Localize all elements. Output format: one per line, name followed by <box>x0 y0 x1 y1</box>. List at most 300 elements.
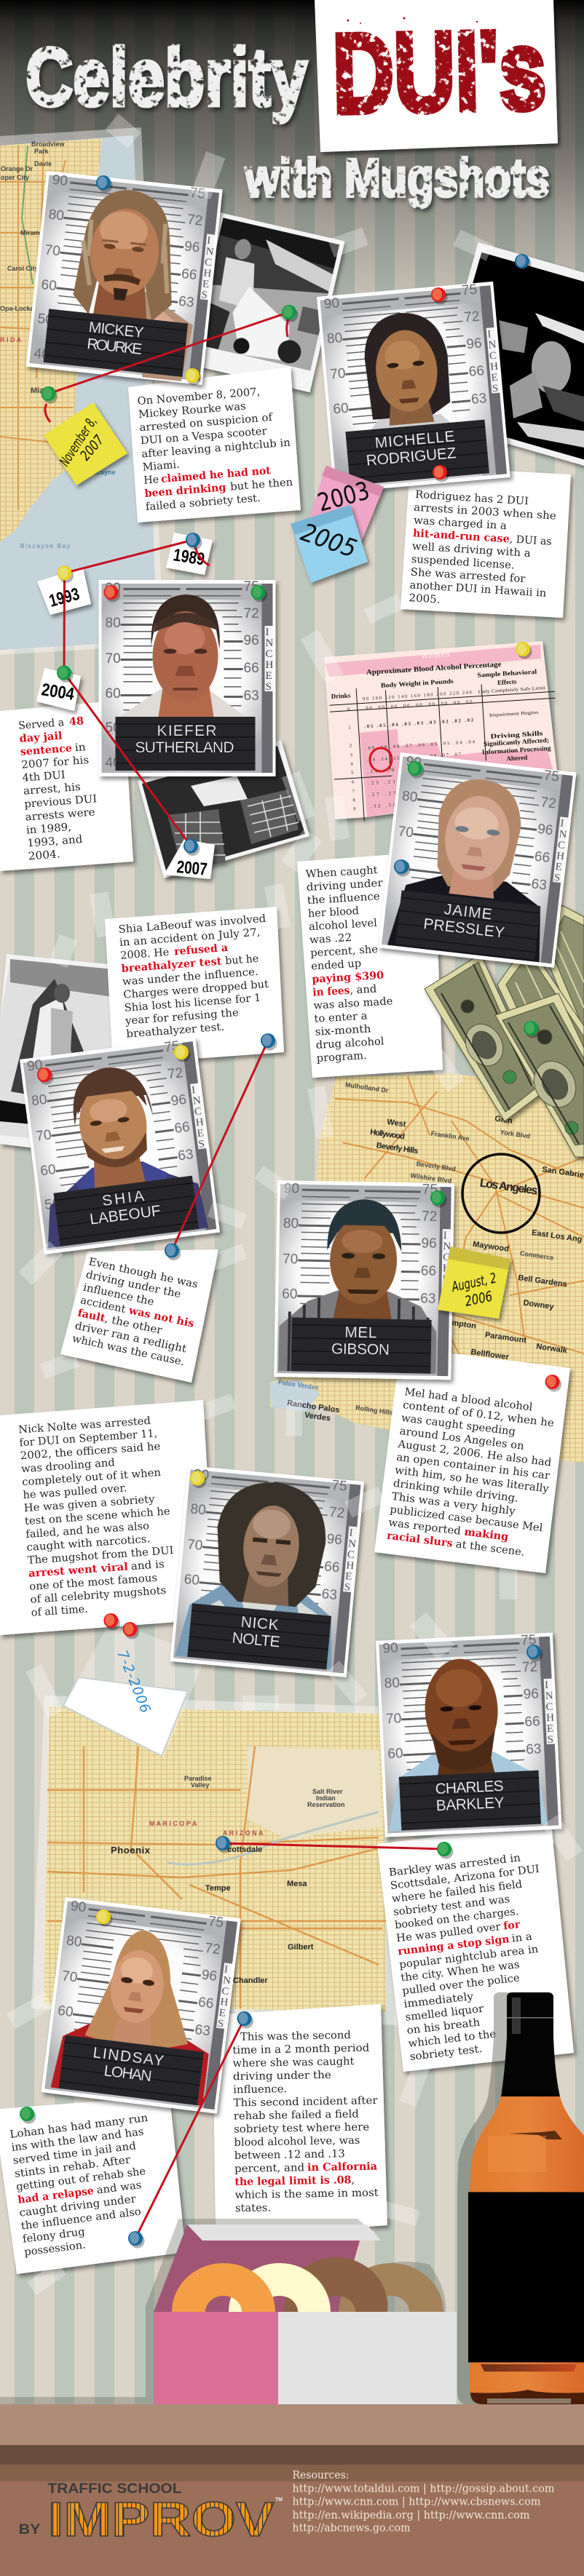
note: Lindsay Lohan history <box>0 2096 186 2274</box>
mugshot: Mickey Rourke: 80 <box>48 207 65 224</box>
date tag: 1989: 1989 <box>172 545 206 570</box>
blood alcohol chart: 1 <box>348 726 351 731</box>
blood alcohol chart: 5 <box>351 770 354 776</box>
mugshot: Michelle Rodriguez: 90 <box>323 295 340 312</box>
mugshot: Michelle Rodriguez: 72 <box>463 309 480 325</box>
note: Jaime Pressley: When caught <box>305 864 378 880</box>
map: Phoenix and Scottsdale <box>31 1696 397 2025</box>
note: Nick Nolte: one of the most famous <box>29 1573 158 1593</box>
mugshot: Mickey Rourke: 96 <box>184 239 200 255</box>
note: Charles Barkley: in a <box>511 1931 533 1945</box>
sticky note: November 8 2007: 2007 <box>77 432 107 464</box>
map: Los Angeles: Bell Gardens <box>518 1273 567 1289</box>
mugshot: Lindsay Lohan: 66 <box>197 1995 214 2012</box>
tan donut <box>339 2263 443 2361</box>
note: Nick Nolte: failed, and he was also <box>25 1520 150 1541</box>
note: Jaime Pressley: ended up <box>311 958 362 972</box>
red string: Lindsay Lohan <box>135 2019 245 2238</box>
mugshot: Shia LaBeouf: 96 <box>170 1092 187 1109</box>
mugshot: Mel Gibson: 75 <box>422 1182 438 1198</box>
mugshot: Mickey Rourke: 63 <box>178 294 194 311</box>
mugshot: Mel Gibson: 66 <box>421 1263 436 1279</box>
note: Michelle Rodriguez <box>400 466 571 618</box>
footer background <box>0 2481 584 2576</box>
map: Phoenix and Scottsdale: Paradise <box>184 1775 212 1782</box>
map: Los Angeles: York Blvd <box>500 1129 531 1140</box>
note: Kiefer Sutherland: in 1989, <box>25 822 72 837</box>
note: Lindsay Lohan history: served time in jail and <box>12 2140 137 2167</box>
photo: prison interior <box>138 740 309 878</box>
note: Lindsay Lohan second incident: , <box>351 2174 355 2186</box>
mugshot: Kiefer Sutherland: 90 <box>105 581 121 596</box>
blood alcohol chart: Impairment Begins <box>489 710 539 718</box>
wooden shelf front <box>0 2445 584 2465</box>
mugshot: Kiefer Sutherland: 72 <box>243 606 259 621</box>
orange donut <box>172 2263 275 2361</box>
blood alcohol chart <box>324 641 562 823</box>
sticky note: 2003 <box>309 466 384 542</box>
blood alcohol chart: .23 .23 .19 <box>368 779 411 786</box>
blood alcohol chart: 3 <box>350 752 352 758</box>
mugshot: Lindsay Lohan: 72 <box>204 1941 221 1957</box>
mugshot: Jaime Pressley: 70 <box>397 824 414 841</box>
note: Shia LaBeouf redlight: fault <box>76 1307 106 1324</box>
mugshot: Shia LaBeouf: INCHES <box>191 1084 208 1150</box>
sticky note: August 2 2006: August, 2 <box>449 1270 498 1295</box>
note: Kiefer Sutherland: previous DUI <box>24 793 98 811</box>
sticky note: November 8 2007 <box>44 402 127 485</box>
note: Charles Barkley: immediately <box>403 1991 475 2011</box>
note: Shia LaBeouf redlight: Even though he was <box>87 1256 199 1291</box>
blood alcohol chart: Altered <box>506 754 527 763</box>
note: Charles Barkley: the city. When he was <box>400 1959 520 1984</box>
sticky note: 2005: 2005 <box>297 518 360 564</box>
note: Shia LaBeouf arrest: breathalyzer test. <box>126 1022 225 1041</box>
note: Shia LaBeouf redlight: which was the cause. <box>71 1333 186 1368</box>
note: Charles Barkley: pulled over the police <box>402 1972 520 1997</box>
mugshot: Lindsay Lohan <box>42 1896 241 2114</box>
mugshot: Jaime Pressley: 63 <box>530 877 548 894</box>
mugshot: Mickey Rourke: 70 <box>44 242 61 259</box>
note: Jaime Pressley: driving under <box>306 878 383 894</box>
mugshot: Mickey Rourke: 90 <box>52 172 68 189</box>
mugshot: Mickey Rourke: 60 <box>40 277 58 294</box>
mugshot: Mel Gibson: 90 <box>284 1181 299 1197</box>
mugshot: Jaime Pressley: 60 <box>393 859 410 875</box>
note: Nick Nolte: arrest went viral <box>28 1560 129 1580</box>
note: Michelle Rodriguez: arrests in 2003 when she <box>414 502 556 522</box>
mugshot: Mel Gibson: 96 <box>421 1236 437 1252</box>
box of donuts <box>154 2225 457 2404</box>
note: Jaime Pressley: her blood <box>308 905 359 920</box>
mugshot: Lindsay Lohan: 60 <box>57 2003 74 2020</box>
mugshot: Jaime Pressley: 96 <box>537 822 553 838</box>
mugshot: Michelle Rodriguez: INCHES <box>487 328 501 394</box>
note: Lindsay Lohan history: getting out of rehab she <box>15 2166 146 2193</box>
note: Mel Gibson: drinking while driving. <box>392 1478 519 1505</box>
mugshot: Charles Barkley: 90 <box>382 1641 398 1657</box>
mugshot: Nick Nolte: 63 <box>321 1586 338 1603</box>
note: Lindsay Lohan history: possession. <box>23 2239 87 2259</box>
note: Lindsay Lohan second incident: between .12 and .13 <box>234 2148 345 2162</box>
note: Mel Gibson: This was a very highly <box>391 1491 516 1518</box>
mugshot: Lindsay Lohan: 63 <box>194 2022 211 2040</box>
mugshot: Jaime Pressley: 72 <box>540 795 557 812</box>
mugshot: Mickey Rourke: 66 <box>181 266 197 283</box>
note: Michelle Rodriguez: well as driving with a <box>411 541 531 560</box>
note: Charles Barkley: Scottsdale, Arizona for DUI <box>390 1864 540 1892</box>
note: Jaime Pressley: program. <box>316 1050 367 1065</box>
mugshot: Mel Gibson <box>274 1180 454 1380</box>
red string: Charles Barkley <box>223 1843 444 1849</box>
mugshot: Jaime Pressley: 66 <box>534 849 551 866</box>
cream donut <box>229 2263 331 2361</box>
map: Los Angeles: Compton <box>441 1317 477 1331</box>
mugshot: Michelle Rodriguez: RODRIGUEZ <box>366 445 457 469</box>
note: Mel Gibson: around Los Angeles on <box>399 1426 525 1452</box>
mugshot: Shia LaBeouf: 80 <box>31 1092 48 1109</box>
note: Nick Nolte: was drooling and <box>21 1457 115 1475</box>
map: Los Angeles: Verdes <box>304 1411 331 1423</box>
mugshot: Michelle Rodriguez <box>317 281 510 493</box>
map: Los Angeles: Hollywood <box>369 1128 406 1141</box>
resources list: http://www.totaldui.com | http://gossip.about.com <box>293 2482 555 2495</box>
map: Phoenix and Scottsdale: Chandler <box>233 1976 268 1985</box>
note: Kiefer Sutherland: sentence <box>20 742 72 758</box>
mugshot: Lindsay Lohan: LOHAN <box>103 2062 153 2085</box>
sticky note: August 2 2006 <box>438 1247 510 1319</box>
mugshot: Mel Gibson: 80 <box>283 1216 299 1232</box>
wooden shelf top <box>0 2404 584 2445</box>
mugshot: Jaime Pressley: 80 <box>401 789 418 806</box>
mugshot: Kiefer Sutherland: SUTHERLAND <box>135 739 234 756</box>
mugshot: Michelle Rodriguez: 96 <box>466 336 482 352</box>
map: Phoenix and Scottsdale: Gilbert <box>288 1943 314 1952</box>
blood alcohol chart: 8 <box>352 798 355 803</box>
note: Lindsay Lohan history: Lohan has had many run <box>9 2112 149 2141</box>
note: Charles Barkley: which led to the <box>408 2028 497 2050</box>
map: Los Angeles: Commerce <box>519 1249 554 1261</box>
note: Lindsay Lohan second incident: This second incident after <box>233 2095 378 2109</box>
blood alcohol chart: Information Processing <box>481 744 551 756</box>
note: Mel Gibson: August 2, 2006. He also had <box>397 1439 552 1469</box>
brown donut <box>284 2257 387 2366</box>
mugshot: Charles Barkley: 72 <box>521 1660 538 1676</box>
note: Michelle Rodriguez: Rodriguez has 2 DUI <box>415 489 529 508</box>
note: Lindsay Lohan second incident <box>213 2004 387 2238</box>
note: Charles Barkley: booked on the charges. <box>394 1906 519 1931</box>
mugshot: Jaime Pressley <box>378 752 577 968</box>
note: Shia LaBeouf redlight: influence the <box>82 1281 155 1308</box>
mugshot: Mel Gibson: 70 <box>283 1252 298 1268</box>
note: Kiefer Sutherland: 2004. <box>28 848 60 862</box>
note: Michelle Rodriguez: hit-and-run case <box>412 527 510 545</box>
note: Nick Nolte: of all celebrity mugshots <box>30 1585 167 1606</box>
mugshot: Kiefer Sutherland: 63 <box>243 688 259 704</box>
map: Los Angeles: Rolling Hills <box>355 1404 393 1417</box>
mugshot: Michelle Rodriguez: 63 <box>470 391 487 408</box>
map: Miami: Miami <box>31 386 53 395</box>
blood alcohol chart: .00 .00 .00 .00 .00 .00 .00 .00 .00 <box>363 699 473 711</box>
mugshot: Michelle Rodriguez: MICHELLE <box>374 428 455 452</box>
map: Miami: Opa-Locka <box>0 305 35 312</box>
box lid flap <box>187 2225 381 2241</box>
blood alcohol chart: Only Completely Safe Limit <box>478 685 545 695</box>
note: Charles Barkley: sobriety test and was <box>392 1893 510 1918</box>
note: Lindsay Lohan second incident: This was the second <box>240 2030 351 2043</box>
note: Mel Gibson: Mel had a blood alcohol <box>404 1386 533 1414</box>
map: Los Angeles: Palos Verdes <box>277 1378 319 1391</box>
note: Lindsay Lohan second incident: where she was caught <box>232 2056 355 2070</box>
mugshot: Mickey Rourke: MICKEY <box>88 319 145 341</box>
blood alcohol chart: Significantly Affected; <box>484 736 549 747</box>
note: Charles Barkley: where he failed his field <box>391 1879 523 1905</box>
sticky note: 2005 <box>291 505 368 583</box>
note: Jaime Pressley: percent, she <box>310 944 379 959</box>
map: Phoenix and Scottsdale: Tempe <box>205 1884 231 1893</box>
note: Jaime Pressley: in fees <box>312 985 350 999</box>
note: Nick Nolte: for DUI on September 11, <box>19 1428 158 1449</box>
mugshot: Nick Nolte: 75 <box>331 1478 347 1495</box>
mugshot: Charles Barkley: 70 <box>386 1711 402 1727</box>
mugshot: Nick Nolte: 90 <box>193 1467 210 1484</box>
blood alcohol chart: Approximate Blood Alcohol Percentage <box>366 661 502 677</box>
note: Nick Nolte: and is <box>130 1559 165 1573</box>
note: Charles Barkley: sobriety test. <box>409 2043 483 2063</box>
blood alcohol chart: .05 .05 .04 .03 .03 .03 .02 .02 .02 <box>364 717 473 729</box>
note: Mickey Rourke <box>128 367 301 522</box>
mugshot: Kiefer Sutherland: 40 <box>105 755 121 771</box>
mugshot: Jaime Pressley: PRESSLEY <box>422 915 505 942</box>
note: Mel Gibson: at the scene. <box>455 1538 525 1559</box>
note: Kiefer Sutherland: arrest, his <box>23 782 81 798</box>
note: Mickey Rourke: arrested on suspicion of <box>139 412 274 434</box>
note: Jaime Pressley: the influence <box>307 891 380 907</box>
logo: Traffic School by Improv: TRAFFIC SCHOOL <box>48 2481 182 2497</box>
mugshot: Charles Barkley: INCHES <box>545 1679 556 1746</box>
mugshot: Nick Nolte: 72 <box>328 1505 345 1522</box>
map: Los Angeles: Los Angeles <box>479 1177 538 1198</box>
map: Phoenix and Scottsdale: Mesa <box>287 1880 307 1888</box>
sleeve with date card: 7-2-2006 <box>114 1648 154 1715</box>
note: Mickey Rourke: but he then <box>230 477 293 493</box>
title: Celebrity: Celebrity <box>25 31 307 123</box>
mugshot: Kiefer Sutherland: 66 <box>243 661 259 676</box>
mugshot: Michelle Rodriguez: 60 <box>333 401 350 418</box>
mugshot: Michelle Rodriguez: 70 <box>330 366 346 383</box>
note: Lindsay Lohan history: and was <box>96 2179 142 2197</box>
pushpins <box>20 175 561 2249</box>
shadow along shelf and behind box <box>0 2219 446 2404</box>
mugshot: Kiefer Sutherland <box>99 579 275 776</box>
note: Mel Gibson <box>374 1347 570 1573</box>
map: Phoenix and Scottsdale: Valley <box>191 1781 210 1789</box>
note: Kiefer Sutherland: 48 <box>68 715 84 728</box>
resources list: http://abcnews.go.com <box>293 2521 411 2535</box>
mugshot: Kiefer Sutherland: KIEFER <box>157 723 217 739</box>
blood alcohol chart: Drinks <box>331 691 351 700</box>
mugshot: Lindsay Lohan: 90 <box>70 1899 87 1916</box>
dark gradient at top of page <box>0 0 584 378</box>
map: Miami: Davie <box>34 160 52 167</box>
note: Kiefer Sutherland: 4th DUI <box>22 769 66 784</box>
note: Shia LaBeouf arrest <box>105 907 284 1065</box>
map: Phoenix and Scottsdale: Indian <box>316 1794 335 1802</box>
note: Mel Gibson: with him, so he was literally <box>394 1465 550 1495</box>
blood alcohol chart: 2 <box>350 743 352 749</box>
note: Shia LaBeouf redlight: was not his <box>127 1304 195 1330</box>
note: Lindsay Lohan second incident: in Calfornia <box>307 2160 378 2174</box>
map: Miami: Key Biscayne <box>73 469 116 476</box>
note: Jaime Pressley: was also made <box>313 995 393 1012</box>
note: Lindsay Lohan second incident: blood alcohol leve, was <box>234 2135 360 2149</box>
map: Miami: Orange Dr <box>1 165 33 172</box>
mugshot: Charles Barkley: 80 <box>384 1676 400 1691</box>
note: Mel Gibson: was caught speeding <box>400 1412 516 1438</box>
note: Kiefer Sutherland: Served a <box>18 717 65 732</box>
note: Nick Nolte: The mugshot from the DUI <box>27 1545 174 1567</box>
mugshot: Mickey Rourke <box>26 170 223 385</box>
blood alcohol chart: .18 .18 .15 <box>367 767 411 774</box>
blood alcohol chart: Driving Skills <box>490 729 543 740</box>
map: Los Angeles: East Los Ang <box>531 1228 583 1244</box>
note: Shia LaBeouf arrest: breathalyzer test <box>121 955 222 975</box>
map: Los Angeles: Willow Brook <box>437 1303 489 1319</box>
blood alcohol chart: Effects <box>497 677 517 686</box>
mugshot: Nick Nolte: 80 <box>190 1502 207 1518</box>
logo: Traffic School by Improv: TM <box>275 2497 283 2503</box>
note: Shia LaBeouf redlight: , the other <box>103 1313 163 1337</box>
note: Mickey Rourke: Mickey Rourke was <box>138 401 246 421</box>
mugshot: Mel Gibson: 72 <box>422 1209 437 1225</box>
blood alcohol chart: .09 .09 .08 .07 .06 .05 .05 .04 .04 <box>366 739 476 751</box>
mugshot: Jaime Pressley: 90 <box>405 754 422 771</box>
note: Shia LaBeouf arrest: in an accident on July 27, <box>119 926 261 949</box>
mugshot: Charles Barkley: 66 <box>524 1714 540 1730</box>
note: Shia LaBeouf arrest: 2008. He <box>120 947 170 962</box>
map: Phoenix and Scottsdale: cottsdale <box>227 1845 262 1854</box>
note: Shia LaBeouf arrest: year for refusing the <box>125 1007 239 1027</box>
note: Nick Nolte: caught with narcotics. <box>26 1533 151 1554</box>
mugshot: Shia LaBeouf: SHIA <box>101 1188 145 1209</box>
map: Phoenix and Scottsdale: Salt River <box>312 1788 343 1795</box>
date tag: 2004: 2004 <box>40 680 76 704</box>
note: Charles Barkley: Barkley was arrested in <box>388 1852 521 1879</box>
note: Nick Nolte <box>0 1400 216 1635</box>
resources list: http://www.cnn.com | http://www.cbsnews.com <box>293 2494 540 2508</box>
mugshot: Shia LaBeouf: 72 <box>167 1065 184 1083</box>
note: Shia LaBeouf redlight: driving under the <box>84 1269 182 1300</box>
note: Mickey Rourke: been drinking <box>144 481 226 500</box>
note: Nick Nolte: he was pulled over. <box>23 1482 127 1501</box>
mugshot: Lindsay Lohan: 96 <box>201 1968 218 1984</box>
note: Charles Barkley: on his breath <box>406 2017 481 2037</box>
note: Michelle Rodriguez: was charged in a <box>414 515 508 532</box>
map: Phoenix and Scottsdale: A R I Z O N A <box>223 1829 264 1837</box>
note: Lindsay Lohan history: had a relapse <box>17 2185 95 2206</box>
map: Los Angeles: Norwalk <box>536 1342 569 1355</box>
note: Kiefer Sutherland: in <box>74 742 86 754</box>
mugshot: Mel Gibson: 60 <box>282 1287 298 1303</box>
mugshot: Kiefer Sutherland: 60 <box>105 686 121 701</box>
note: Charles Barkley: for <box>502 1918 521 1933</box>
blood alcohol chart: 90 100 120 140 160 180 200 220 240 <box>363 690 472 701</box>
note: Kiefer Sutherland: day jail <box>19 730 63 745</box>
note: Nick Nolte: test on the scene which he <box>25 1506 170 1527</box>
map: Los Angeles: Beverly Blvd <box>416 1160 457 1173</box>
blood alcohol chart: .27 .27 .23 <box>368 790 412 798</box>
mugshot: Mel Gibson: 63 <box>420 1291 436 1307</box>
blood alcohol chart: Women <box>420 650 451 661</box>
note: Nick Nolte: 2002, the officers said he <box>20 1441 161 1462</box>
note: Michelle Rodriguez: 2005. <box>409 592 441 606</box>
mugshot: Jaime Pressley: JAIME <box>443 901 493 923</box>
map: Los Angeles: Maywood <box>472 1240 510 1254</box>
mugshot: Charles Barkley: 75 <box>521 1633 537 1649</box>
note: Shia LaBeouf arrest: Shia LaBeouf was involved <box>118 913 267 936</box>
mugshot: Shia LaBeouf: 70 <box>35 1127 52 1145</box>
mugshot: Lindsay Lohan: 70 <box>61 1968 78 1986</box>
blood alcohol chart: 6 <box>352 779 355 785</box>
mugshot: Nick Nolte: 60 <box>184 1572 200 1589</box>
logo: Traffic School by Improv: IMPROV <box>48 2492 275 2547</box>
blood alcohol chart: Body Weight in Pounds <box>381 677 454 689</box>
date tag: 1993: 1993 <box>47 584 82 611</box>
map: Los Angeles: Franklin Ave <box>430 1129 470 1142</box>
note: Jaime Pressley: alcohol level <box>309 918 378 933</box>
note: Lindsay Lohan second incident: sobriety test where here <box>234 2121 369 2136</box>
note: Lindsay Lohan second incident: driving under the <box>233 2070 331 2083</box>
note: Michelle Rodriguez: another DUI in Hawaii in <box>409 579 547 600</box>
note: Charles Barkley: He was pulled over <box>395 1921 501 1944</box>
mugshot: Lindsay Lohan: LINDSAY <box>92 2044 165 2070</box>
map: Miami: Broadview <box>31 140 66 148</box>
red string: Shia LaBeouf <box>172 1041 268 1250</box>
mugshot: Shia LaBeouf: 63 <box>177 1147 194 1164</box>
note: Michelle Rodriguez: suspended license. <box>411 554 515 571</box>
note: Lindsay Lohan history: felony drug <box>22 2226 85 2246</box>
sticky note: 2003: 2003 <box>315 476 373 518</box>
mugshot: Mel Gibson: INCHES <box>442 1230 451 1296</box>
map: Los Angeles: Mulholland Dr <box>344 1081 390 1094</box>
note: Nick Nolte: Nick Nolte was arrested <box>18 1415 151 1436</box>
blood alcohol chart: Sample Behavioral <box>477 668 537 679</box>
note: Jaime Pressley: drug alcohol <box>315 1035 384 1052</box>
sleeve with date card <box>63 1621 206 1757</box>
note: Shia LaBeouf arrest: refused a <box>174 942 229 958</box>
map: Los Angeles: Glen <box>494 1115 513 1126</box>
note: Mel Gibson: content of of 0.12, when he <box>402 1399 555 1429</box>
box front pink <box>154 2312 278 2404</box>
resources list: http://en.wikipedia.org | http://www.cnn.com <box>293 2508 530 2521</box>
note: Lindsay Lohan second incident: time in a 2 month period <box>232 2043 369 2056</box>
map: Los Angeles: Paramount <box>484 1331 527 1345</box>
note: Lindsay Lohan second incident: percent, and <box>234 2162 304 2175</box>
note: Shia LaBeouf redlight: accident <box>79 1295 127 1316</box>
map: Miami: Park <box>34 148 50 155</box>
mugshot: Michelle Rodriguez: 66 <box>468 363 485 380</box>
mugshot: Michelle Rodriguez: 75 <box>461 282 478 299</box>
dollar bills <box>425 905 584 1157</box>
note: Charles Barkley: smelled liquor <box>405 2003 484 2024</box>
note: Shia LaBeouf arrest: Charges were dropped but <box>123 979 269 1001</box>
date tag: 2007: 2007 <box>175 857 208 880</box>
mugshot: Shia LaBeouf: 50 <box>44 1196 61 1213</box>
note: Shia LaBeouf arrest: was under the influence. <box>122 966 259 988</box>
note: Kiefer Sutherland: arrests were <box>25 806 95 824</box>
date tag: 2004 <box>36 668 81 711</box>
map: Miami: oper City <box>1 174 29 181</box>
